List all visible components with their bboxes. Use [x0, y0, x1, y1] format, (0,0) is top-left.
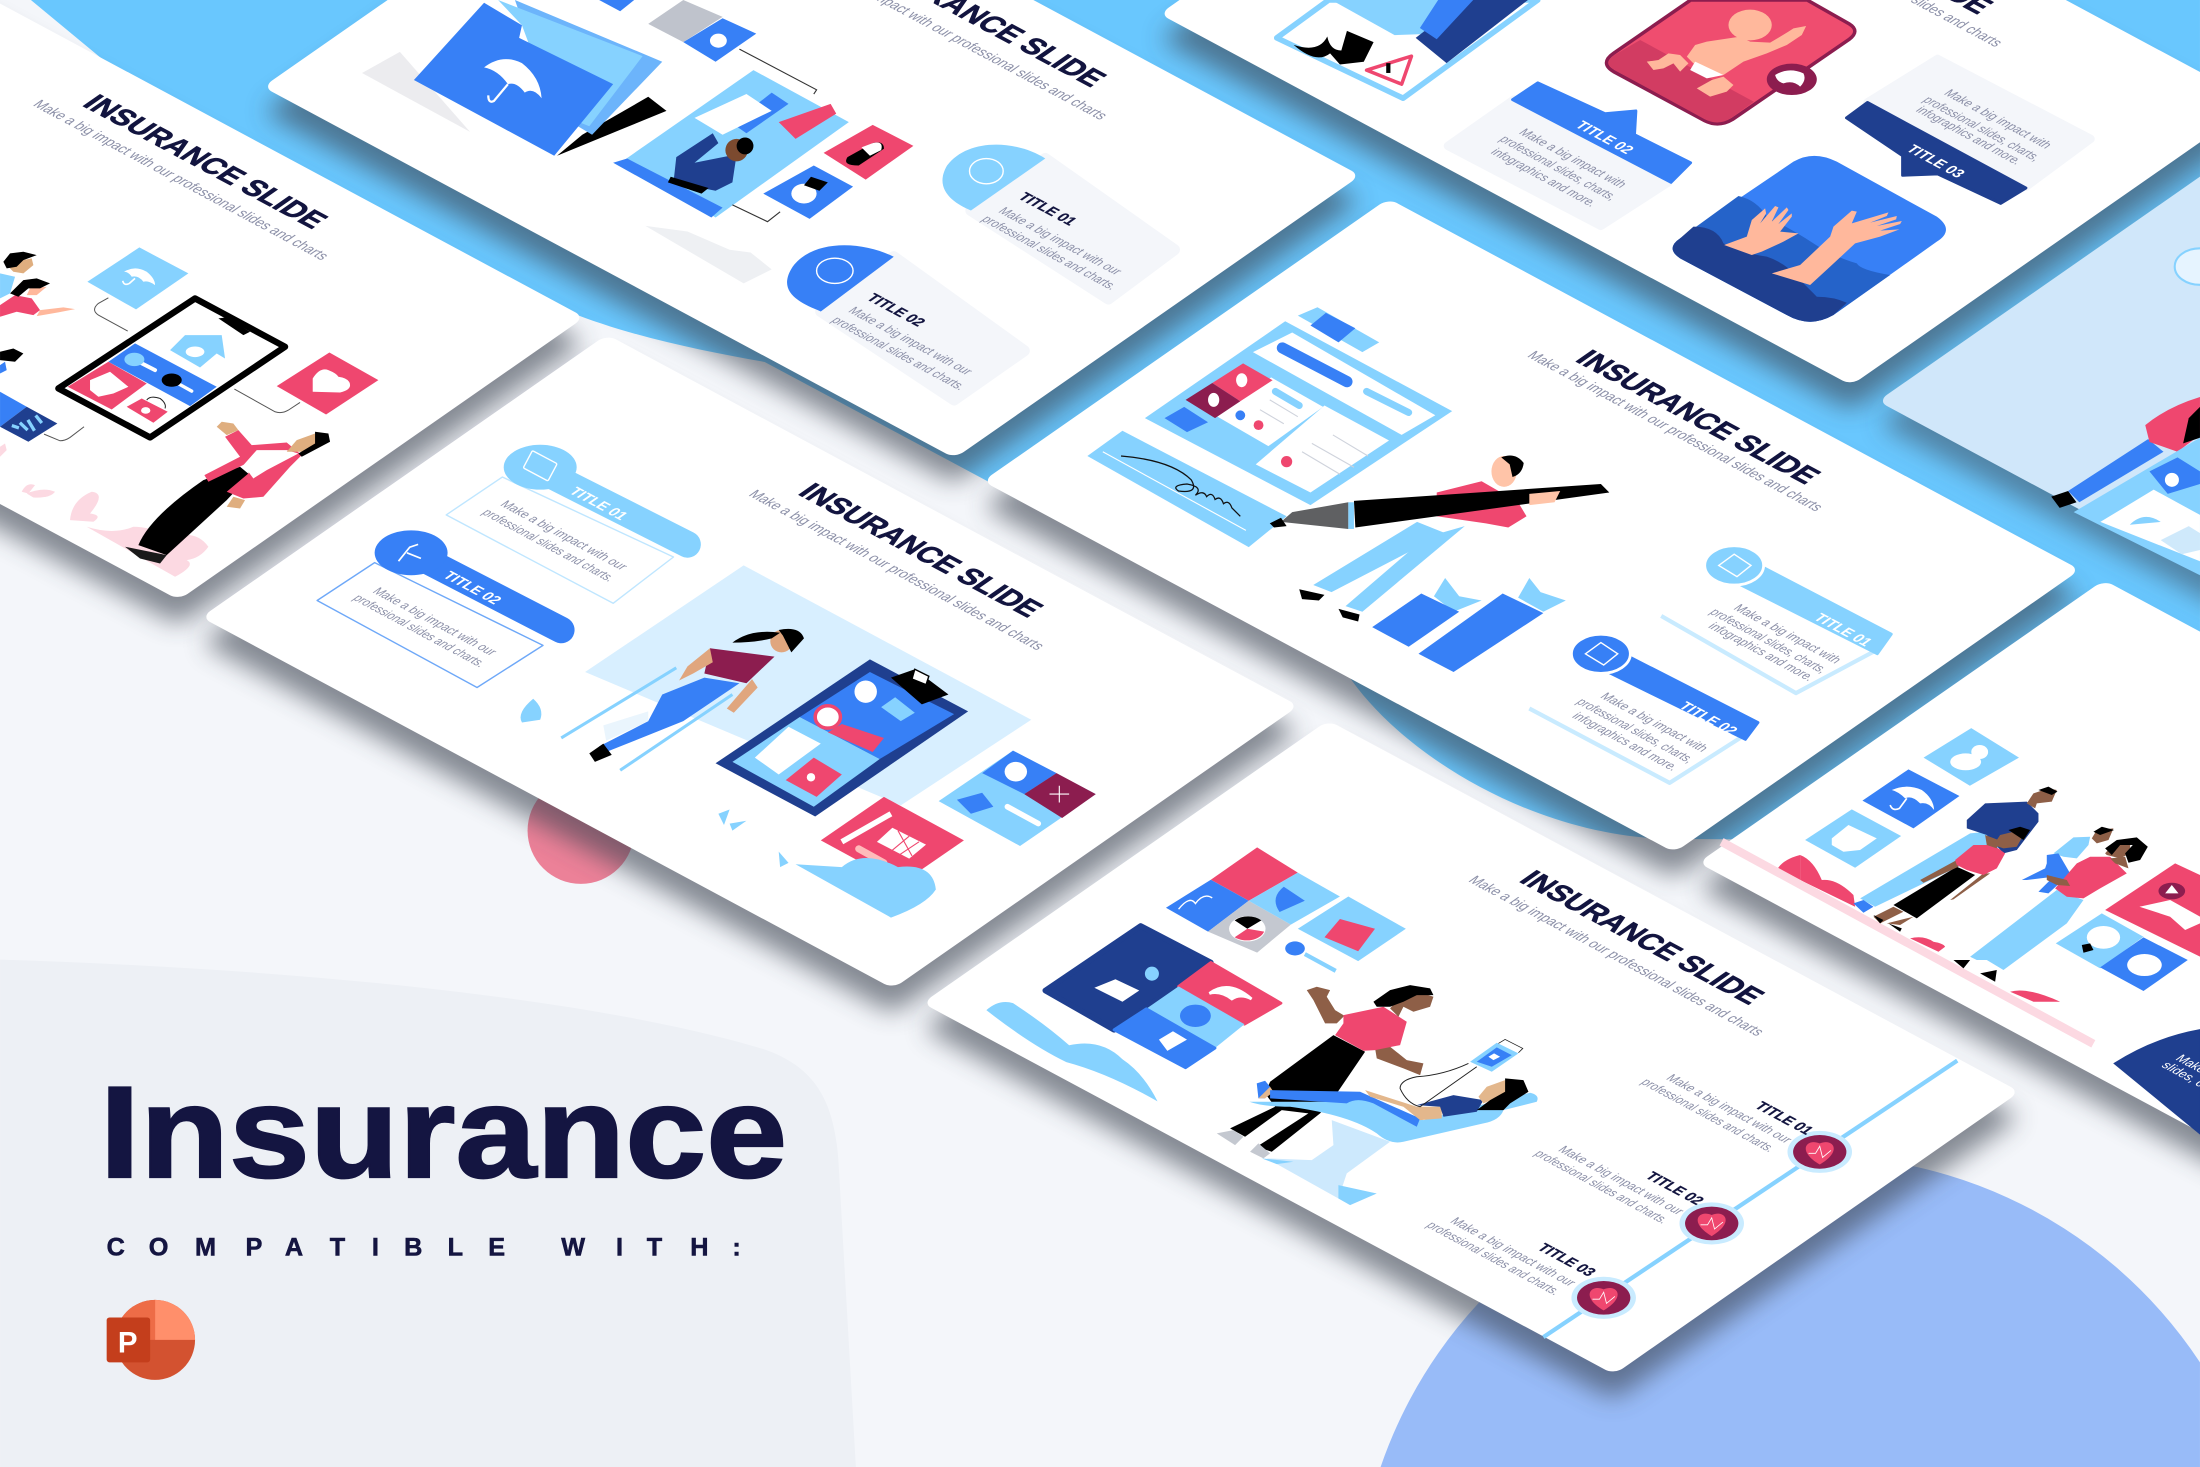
- text block: title 02: professional slides, charts,: [1496, 133, 1621, 202]
- text block: title 02: [1448, 83, 1691, 226]
- illustration: tablet: [58, 298, 285, 437]
- slide: tablet and woman: [0, 0, 584, 625]
- text block: title 03: professional slides, charts,: [1920, 94, 2045, 163]
- text block: timeline 03: professional slides and charts.: [1423, 1219, 1565, 1297]
- text block: title 02: [1529, 634, 1758, 783]
- text block: title 02: TITLE 02: [1571, 119, 1637, 157]
- illustration: doctor panel: [613, 70, 849, 217]
- heading: INSURANCE SLIDE: [791, 479, 1050, 622]
- slide: pen and signature: [983, 198, 2080, 878]
- iv drip: [1400, 1039, 1523, 1107]
- illustration: red mounds: [1775, 855, 2060, 1002]
- chair base: [1267, 1120, 1390, 1198]
- decorative shape: sky blue backdrop: [31, 0, 2200, 842]
- nurse and chair scene: [1217, 985, 1538, 1205]
- text block: title 01: TITLE 01: [1809, 611, 1875, 649]
- icon tile: umbrella: [1862, 769, 1959, 828]
- icon tile: shield: [1805, 809, 1901, 868]
- nurse: [1217, 985, 1433, 1158]
- icon tile: blue and maroon card: [939, 751, 1096, 846]
- icon card: quadrants: [1045, 926, 1281, 1068]
- text block: title 02: Make a big impact with: [1516, 126, 1631, 190]
- icon: PowerPoint: P: [118, 1327, 138, 1360]
- illustration: browser window: [1145, 307, 1452, 505]
- illustration: woman on crutches: [561, 629, 804, 770]
- text block: title 02: professional slides, charts,: [1573, 696, 1698, 765]
- marker: timeline 02: [1679, 1202, 1744, 1244]
- subtitle: Make a big impact with our professional slides and charts: [1523, 349, 1826, 514]
- text block: dark blue callout: [2114, 1030, 2200, 1134]
- illustration: signature panel: [1087, 431, 1287, 547]
- heading: INSURANCE SLIDE: [1512, 866, 1771, 1009]
- heading: INSURANCE SLIDE: [75, 90, 334, 234]
- icon: PowerPoint: [107, 1300, 195, 1380]
- text block: title 03: infographics and more.: [1913, 104, 2027, 167]
- text block: title 02: Make a big impact with our: [369, 585, 502, 658]
- text block: title 02: Make a big impact with our: [845, 304, 977, 377]
- figure: woman with skirt: [1873, 827, 2030, 932]
- text block: title 01: [446, 445, 688, 603]
- icon: heart tile: [277, 352, 378, 414]
- icon tile: people: [1924, 728, 2019, 786]
- subtitle: Make a big impact with our professional slides and charts: [29, 98, 332, 263]
- slide: baby and hands: [1159, 0, 2200, 411]
- text block: title 02: professional slides and charts.: [828, 314, 970, 392]
- band: pink floor: [1722, 842, 2093, 1044]
- text block: title 03: Make a big impact with: [1941, 87, 2056, 151]
- text block: title 01: Make a big impact with our: [995, 205, 1127, 277]
- text block: title 02: infographics and more.: [1487, 146, 1601, 209]
- text block: title 01: professional slides and charts.: [978, 213, 1121, 292]
- illustration: presenter woman: [125, 422, 330, 563]
- subtitle: Make a big impact with our professional slides and charts: [1464, 874, 1767, 1039]
- icon: umbrella tile: [87, 247, 188, 309]
- decoration: pink hearts: [0, 443, 208, 577]
- decoration: cloud and drops: [521, 699, 936, 918]
- illustration: umbrella folder: [362, 0, 666, 156]
- text block: title 01: infographics and more.: [1705, 620, 1819, 683]
- text block: title 02: [317, 530, 561, 687]
- text block: title 01: Make a big impact with: [1730, 602, 1846, 666]
- chair and patient: [1249, 1078, 1538, 1143]
- text block: title 01: professional slides, charts,: [1706, 606, 1832, 675]
- text block: title 02: professional slides and charts.: [350, 592, 490, 669]
- title: Insurance: [100, 1059, 787, 1205]
- text block: title 01: professional slides and charts.: [479, 506, 619, 584]
- tablet scene: [0, 247, 378, 577]
- text block: title 03: TITLE 03: [1902, 143, 1968, 181]
- illustration backdrop: [585, 565, 1031, 805]
- text block: title 02: infographics and more.: [1569, 710, 1683, 773]
- text block: timeline 01: Make a big impact with our: [1663, 1072, 1797, 1146]
- figure: man: [1853, 787, 2057, 913]
- icon tiles: medicine: [599, 0, 913, 283]
- icon card: hands in water: [1673, 156, 1946, 322]
- illustration: clipboard: [716, 659, 968, 817]
- text block: title 02: TITLE 02: [862, 292, 928, 329]
- marker: timeline 01: [1787, 1131, 1852, 1173]
- text block: title 01: TITLE 01: [565, 485, 631, 523]
- decoration: cloud: [986, 1002, 1158, 1101]
- icon card: baby: [1606, 0, 1855, 124]
- text block: title 01: [942, 145, 1174, 299]
- icon tile: red card: [2105, 863, 2200, 957]
- marker: timeline 03: [1571, 1277, 1636, 1319]
- illustration: chart tiles: [0, 392, 57, 442]
- icon tiles: small grid: [1166, 847, 1406, 971]
- icon tile: bulb: [2056, 913, 2143, 968]
- figure: woman holding child: [1953, 827, 2148, 982]
- heading: INSURANCE SLIDE: [1568, 346, 1827, 489]
- text block: timeline 03: Make a big impact with our: [1447, 1215, 1581, 1289]
- text block: title 02: TITLE 02: [1675, 700, 1741, 738]
- illustration: blue bars with plants: [1372, 578, 1566, 672]
- slide: crutches and clipboard: [201, 335, 1299, 1014]
- decorative circle: pink: [528, 777, 634, 884]
- text block: title 02: [787, 245, 1024, 400]
- icon tile: check: [2100, 937, 2188, 991]
- connectors: [44, 298, 300, 441]
- text block: title 02: TITLE 02: [439, 569, 505, 607]
- subtitle: compatible with: COMPATIBLE WITH:: [107, 1234, 741, 1262]
- illustration: people at left: [0, 252, 75, 373]
- text block: title 01: Make a big impact with our: [497, 498, 632, 573]
- slide: folder: [263, 0, 1360, 484]
- subtitle: Make a big impact with our professional slides and charts: [744, 488, 1048, 653]
- icon: circle badge: [2175, 248, 2200, 285]
- icon tile: red syringe card: [821, 797, 964, 884]
- text block: title 01: TITLE 01: [1014, 191, 1080, 228]
- family scene: tiles and figures: [1805, 769, 2200, 991]
- illustration: person with table: [2051, 397, 2200, 575]
- text block: timeline 03: TITLE 03: [1533, 1241, 1599, 1279]
- text block: title 02: Make a big impact with: [1597, 690, 1712, 754]
- text block: timeline 01: professional slides and charts.: [1638, 1076, 1779, 1154]
- slide: dentist chair timeline: [922, 720, 2020, 1400]
- decorative circle: periwinkle: [1381, 1156, 2200, 1467]
- timeline line: [1543, 1061, 1957, 1337]
- text block: title 01: [1661, 546, 1891, 693]
- text block: timeline 02: TITLE 02: [1641, 1170, 1707, 1208]
- slide: far right pale blue: [1878, 118, 2200, 795]
- panel: lower left title backdrop: [0, 960, 856, 1467]
- illustration: person with giant pen: [1270, 456, 1609, 622]
- text block: timeline 01: TITLE 01: [1750, 1100, 1816, 1137]
- text block: title 03: [1846, 59, 2091, 203]
- text block: timeline 02: professional slides and charts.: [1531, 1147, 1673, 1226]
- illustration: car accident card: [1277, 0, 1538, 98]
- slide: family: [1698, 580, 2200, 1259]
- text block: timeline 02: Make a big impact with our: [1555, 1143, 1689, 1217]
